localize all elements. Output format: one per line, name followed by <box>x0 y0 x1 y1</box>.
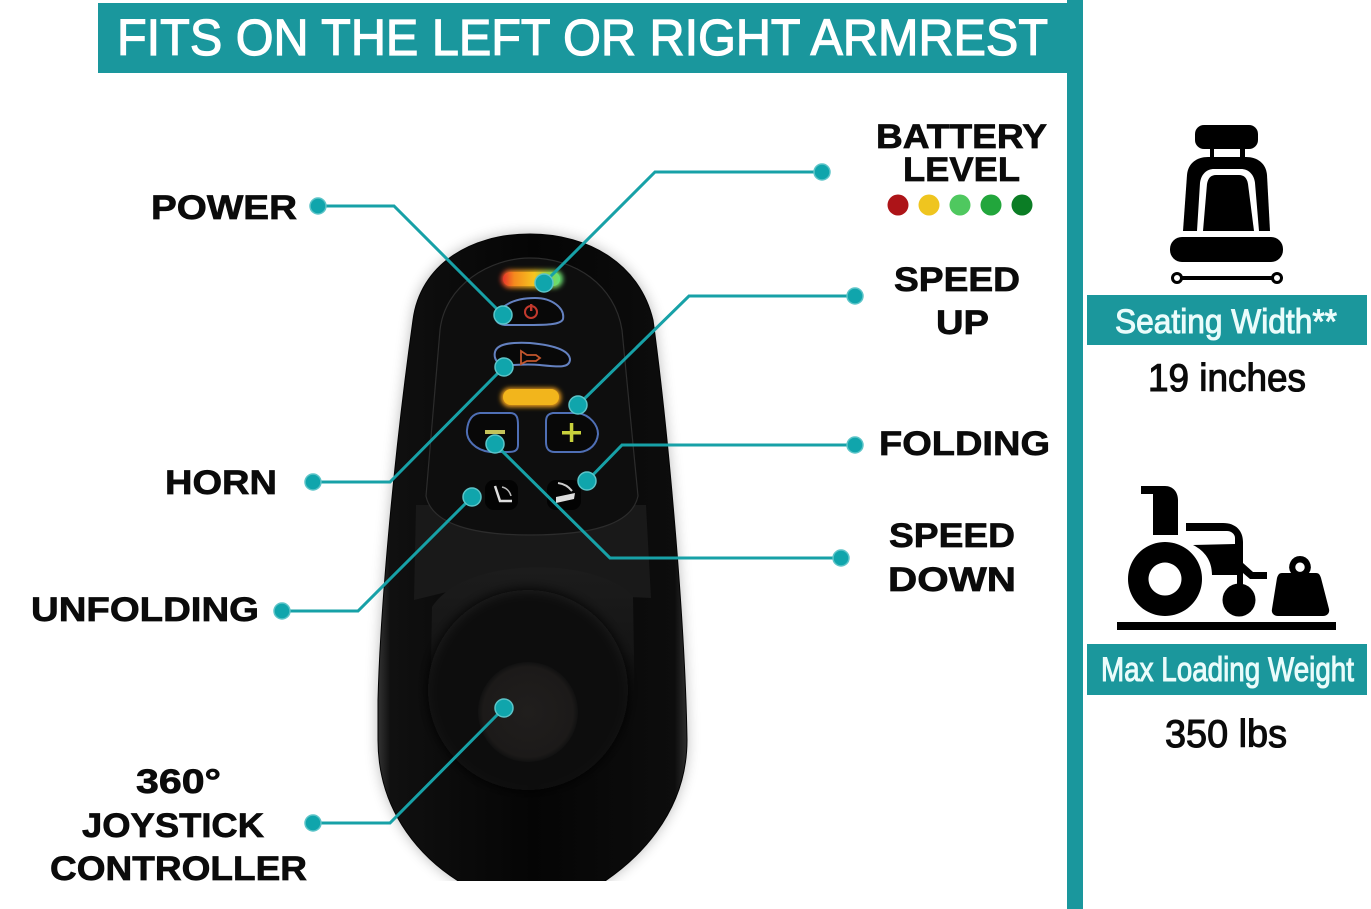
header banner: FITS ON THE LEFT OR RIGHT ARMREST <box>117 9 1048 66</box>
icon: car seat with width marker <box>1170 125 1283 282</box>
textured mid section <box>414 505 651 600</box>
value: 19 inches: 19 inches <box>1148 357 1306 400</box>
leader: speed down <box>486 435 849 566</box>
power button <box>496 298 563 325</box>
plus button <box>546 413 598 452</box>
label: battery level: BATTERY <box>876 118 1047 156</box>
vertical divider bar <box>1067 0 1083 909</box>
leader: power <box>310 198 512 324</box>
label: speed down: SPEED <box>889 517 1015 555</box>
label: speed down <box>888 517 1016 599</box>
banner: seating width: Seating Width** <box>1115 303 1337 341</box>
value: 350 lbs: 350 lbs <box>1165 713 1287 756</box>
unfolding button <box>485 480 518 510</box>
label: battery level <box>876 118 1047 189</box>
folding button <box>547 480 581 510</box>
battery light bar <box>501 270 563 288</box>
label: speed up: UP <box>936 304 989 342</box>
leader: joystick <box>305 699 513 831</box>
label: 360 joystick controller: 360° <box>136 763 221 801</box>
banner: seating width <box>1087 295 1367 345</box>
icon: wheelchair with weight <box>1117 486 1336 630</box>
leader: horn <box>305 358 513 490</box>
label: 360 joystick controller: JOYSTICK <box>82 807 264 845</box>
label: battery level: LEVEL <box>903 151 1020 189</box>
joystick remote photo <box>378 234 687 885</box>
speed light bar <box>501 388 561 407</box>
leader: folding <box>578 437 863 490</box>
label: 360 joystick controller <box>50 763 307 888</box>
leader: battery level <box>535 164 830 292</box>
joystick base <box>431 588 625 665</box>
label: 360 joystick controller: CONTROLLER <box>50 850 307 888</box>
label: speed up: SPEED <box>894 261 1020 299</box>
minus button <box>467 413 518 452</box>
label: folding: FOLDING <box>879 425 1050 463</box>
horn button <box>495 343 570 366</box>
leader: speed up <box>569 288 863 414</box>
leader: unfolding <box>274 488 481 619</box>
label: unfolding: UNFOLDING <box>31 591 259 629</box>
label: power: POWER <box>151 189 297 227</box>
battery colour dots <box>888 194 1032 216</box>
label: speed up <box>894 261 1020 342</box>
label: speed down: DOWN <box>888 561 1016 599</box>
joystick knob <box>478 662 578 762</box>
label: horn: HORN <box>165 464 277 502</box>
button panel <box>426 258 638 535</box>
